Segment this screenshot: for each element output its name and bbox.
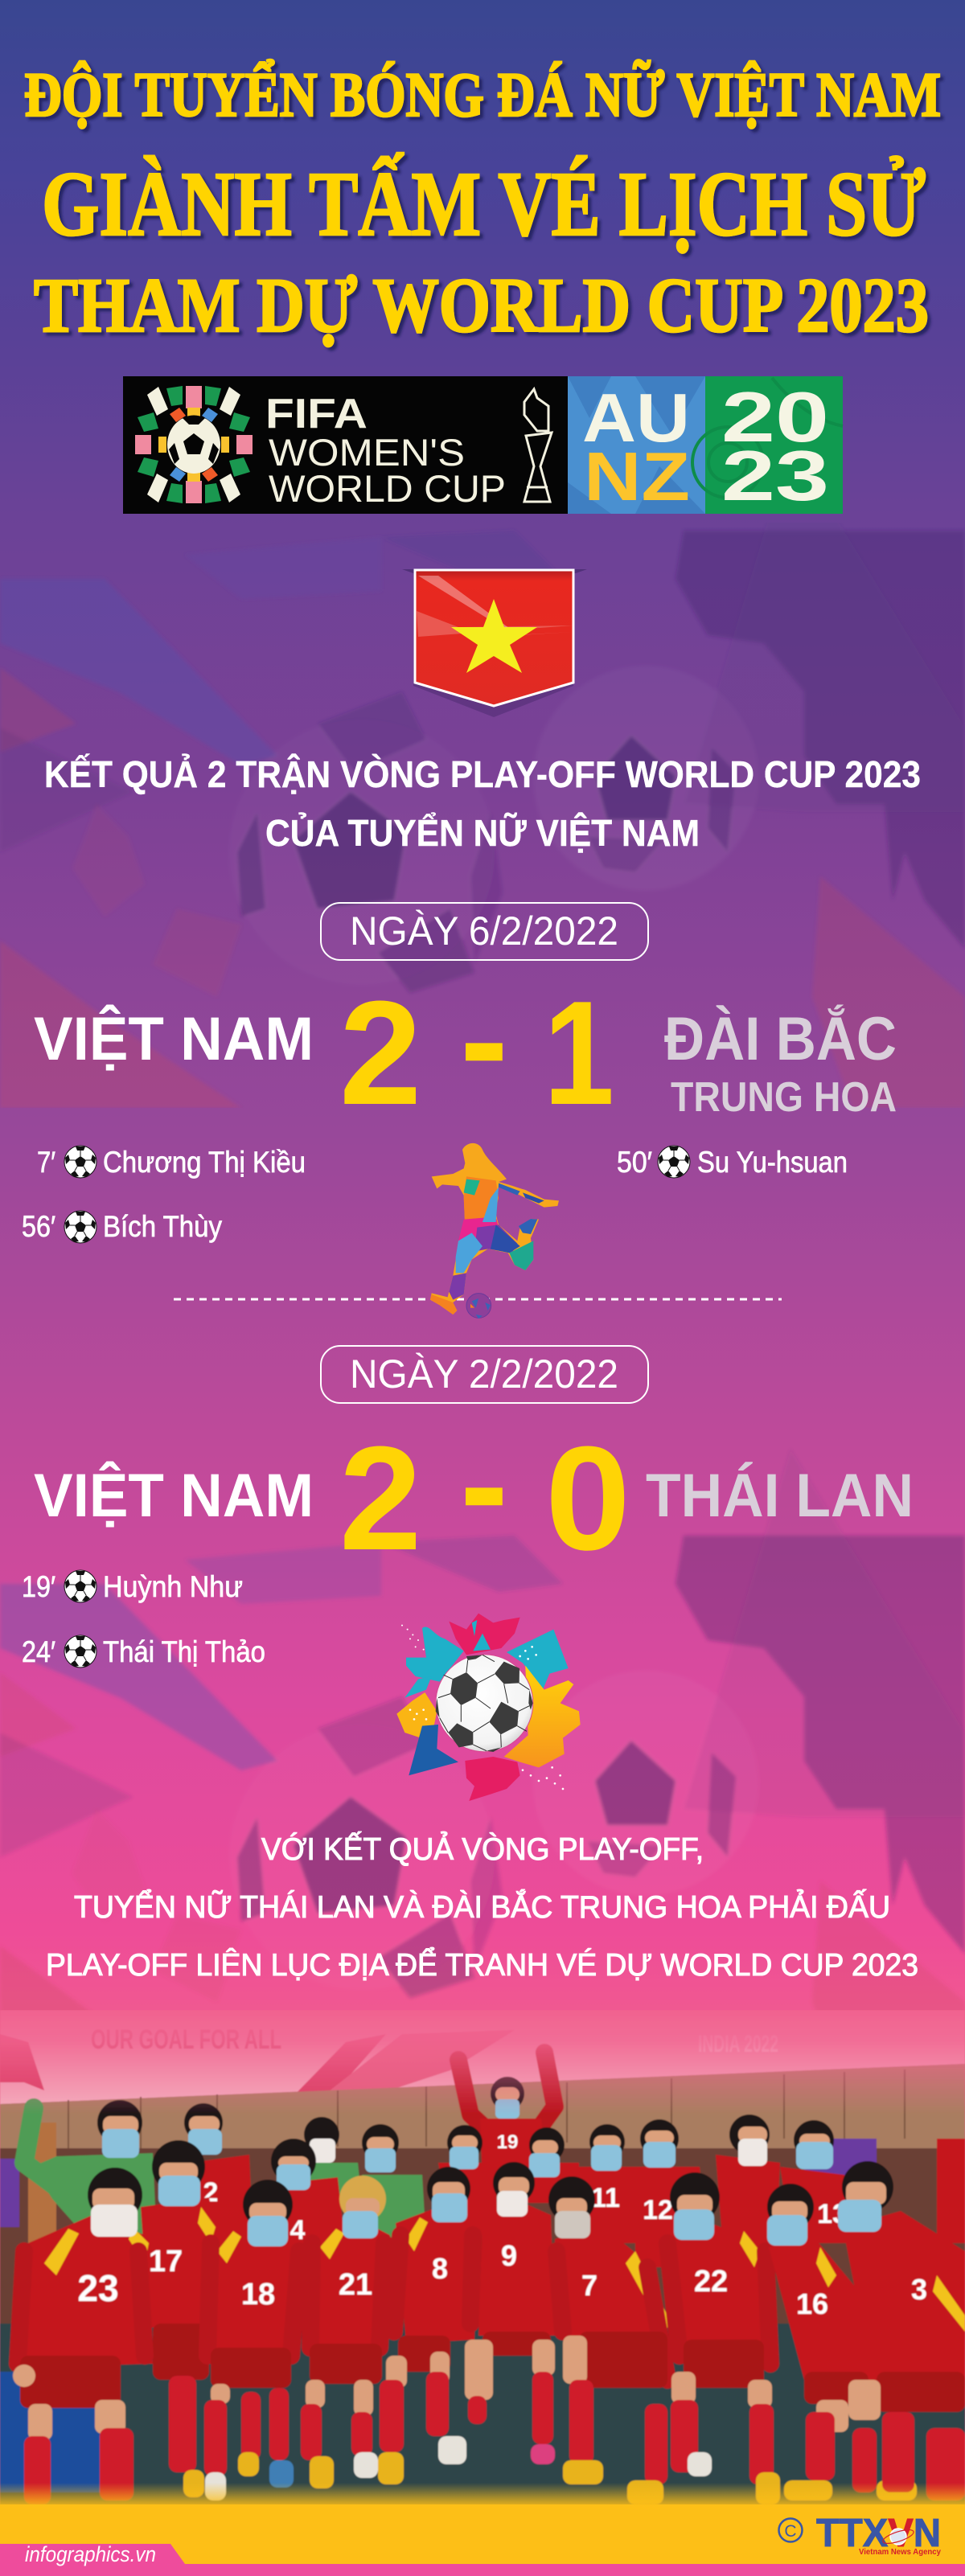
scorer match 1 opponent: Su Yu-hsuan <box>697 1146 848 1179</box>
front row player 22 <box>659 2172 780 2504</box>
photo bottom fade <box>0 2484 965 2504</box>
front row player 16: 16 <box>796 2287 828 2320</box>
score: Việt Nam 2-0 Thái Lan: 2 <box>339 1415 421 1581</box>
score: Việt Nam 2-1 Đài Bắc Trung Hoa: VIỆT NAM <box>34 1004 314 1073</box>
closing note: VỚI KẾT QUẢ VÒNG PLAY-OFF, <box>261 1832 704 1867</box>
scorer match 1 opponent: 50′ <box>617 1146 652 1179</box>
scorers match 1 Vietnam <box>22 1146 306 1243</box>
front row player 23: 23 <box>77 2267 119 2309</box>
score: Việt Nam 2-0 Thái Lan: VIỆT NAM <box>34 1461 314 1530</box>
score: Việt Nam 2-1 Đài Bắc Trung Hoa: - <box>460 956 508 1122</box>
TTXVN logo: TTXVN <box>816 2512 941 2555</box>
score: Việt Nam 2-1 Đài Bắc Trung Hoa <box>34 956 897 1135</box>
banner and wall <box>0 2028 965 2324</box>
FIFA Women's World Cup logo: FIFA <box>265 391 368 437</box>
front row player 9: 9 <box>501 2239 517 2272</box>
scorers match 1 Vietnam: 7′ <box>37 1146 55 1179</box>
front row player 21: 21 <box>339 2268 372 2302</box>
background texture: footballs and splashes, upper <box>0 530 965 1108</box>
Vietnam flag pennant <box>402 569 587 717</box>
front row player 7 <box>548 2176 671 2504</box>
score: Việt Nam 2-1 Đài Bắc Trung Hoa: 2 <box>339 970 421 1135</box>
photo top fade <box>0 2010 965 2115</box>
footer website tab: infographics.vn <box>25 2542 156 2566</box>
emblem <box>135 386 253 503</box>
back row players: 4 <box>290 2215 306 2246</box>
front row player 18: 18 <box>241 2278 275 2311</box>
back row players: 2 <box>203 2177 218 2208</box>
scorers match 1 Vietnam: Bích Thùy <box>103 1210 222 1243</box>
front row player 23 <box>13 2168 153 2504</box>
scorers match 2 Vietnam: Huỳnh Như <box>103 1570 243 1603</box>
match date pill: 2/2/2022: NGÀY 2/2/2022 <box>350 1352 618 1397</box>
score: Việt Nam 2-1 Đài Bắc Trung Hoa: 1 <box>544 970 614 1135</box>
background texture: footballs and splashes, lower <box>0 1455 965 2010</box>
FIFA Women's World Cup logo: WORLD CUP <box>269 467 506 510</box>
TTXVN logo: C <box>784 2522 797 2541</box>
FIFA Women's World Cup logo: WOMEN'S <box>269 431 465 474</box>
scorer match 1 opponent <box>617 1146 848 1179</box>
banner and wall: OUR GOAL FOR ALL <box>91 2024 281 2055</box>
score: Việt Nam 2-1 Đài Bắc Trung Hoa: ĐÀI BẮC <box>664 1004 897 1073</box>
front row player 9 <box>465 2162 555 2464</box>
scorers match 2 Vietnam: 24′ <box>22 1635 55 1668</box>
closing note: PLAY-OFF LIÊN LỤC ĐỊA ĐỂ TRANH VÉ DỰ WORLD CUP 2023 <box>46 1946 918 1983</box>
score: Việt Nam 2-0 Thái Lan: 0 <box>545 1415 630 1581</box>
divider <box>174 1298 782 1301</box>
scorers match 2 Vietnam: 19′ <box>22 1570 55 1603</box>
scorers match 1 Vietnam: 56′ <box>22 1210 55 1243</box>
back row players: 19 <box>497 2131 518 2153</box>
front row player 18 <box>204 2180 304 2500</box>
title <box>24 59 941 348</box>
trophy <box>524 389 552 502</box>
scorers match 1 Vietnam: Chương Thị Kiều <box>103 1146 306 1179</box>
front row player far right <box>838 2161 965 2500</box>
closing note: TUYỂN NỮ THÁI LAN VÀ ĐÀI BẮC TRUNG HOA PHẢI ĐẤU <box>74 1889 890 1925</box>
front row player 7: 7 <box>581 2269 597 2302</box>
TTXVN logo: Vietnam News Agency <box>859 2547 941 2557</box>
front row player 21 <box>301 2176 390 2488</box>
match date pill: 6/2/2022: NGÀY 6/2/2022 <box>350 909 618 954</box>
section heading <box>44 753 921 854</box>
score: Việt Nam 2-0 Thái Lan: - <box>460 1401 508 1566</box>
FIFA Women's World Cup logo: AU <box>582 380 690 457</box>
score: Việt Nam 2-1 Đài Bắc Trung Hoa: TRUNG HOA <box>671 1074 897 1121</box>
carpet <box>0 2324 965 2508</box>
scorers match 2 Vietnam <box>22 1570 265 1668</box>
closing note <box>46 1832 918 1983</box>
back row players: 13 <box>817 2199 848 2229</box>
back row players <box>24 2053 848 2267</box>
FIFA Women's World Cup logo: 20 <box>721 377 829 457</box>
front row player 16 <box>767 2184 917 2500</box>
front row player 22: 22 <box>694 2265 728 2299</box>
footer yellow band <box>0 2504 965 2564</box>
front row player far right: 3 <box>911 2273 927 2306</box>
match date pill: 6/2/2022 <box>321 903 648 960</box>
FIFA Women's World Cup logo: 23 <box>721 436 829 515</box>
FIFA Women's World Cup logo <box>123 376 843 515</box>
icon: football with colour splash <box>396 1614 581 1801</box>
FIFA Women's World Cup logo: NZ <box>584 439 690 515</box>
front row player 17 <box>141 2140 221 2497</box>
back row players: 12 <box>643 2195 673 2225</box>
score: Việt Nam 2-0 Thái Lan: THÁI LAN <box>646 1462 914 1530</box>
front row player 17: 17 <box>149 2245 183 2279</box>
front row player 8: 8 <box>432 2252 448 2285</box>
banner and wall: INDIA 2022 <box>698 2031 778 2057</box>
front row player 8 <box>378 2167 478 2484</box>
scorers match 2 Vietnam: Thái Thị Thảo <box>103 1635 265 1668</box>
match date pill: 2/2/2022 <box>321 1346 648 1403</box>
score: Việt Nam 2-0 Thái Lan <box>34 1401 914 1581</box>
team photo (drawn illustration) <box>0 2010 965 2508</box>
footer pink stripe <box>0 2564 965 2576</box>
icon: colourful kicking player <box>430 1143 559 1319</box>
back row players: 11 <box>591 2183 620 2213</box>
section heading: CỦA TUYỂN NỮ VIỆT NAM <box>265 812 700 854</box>
